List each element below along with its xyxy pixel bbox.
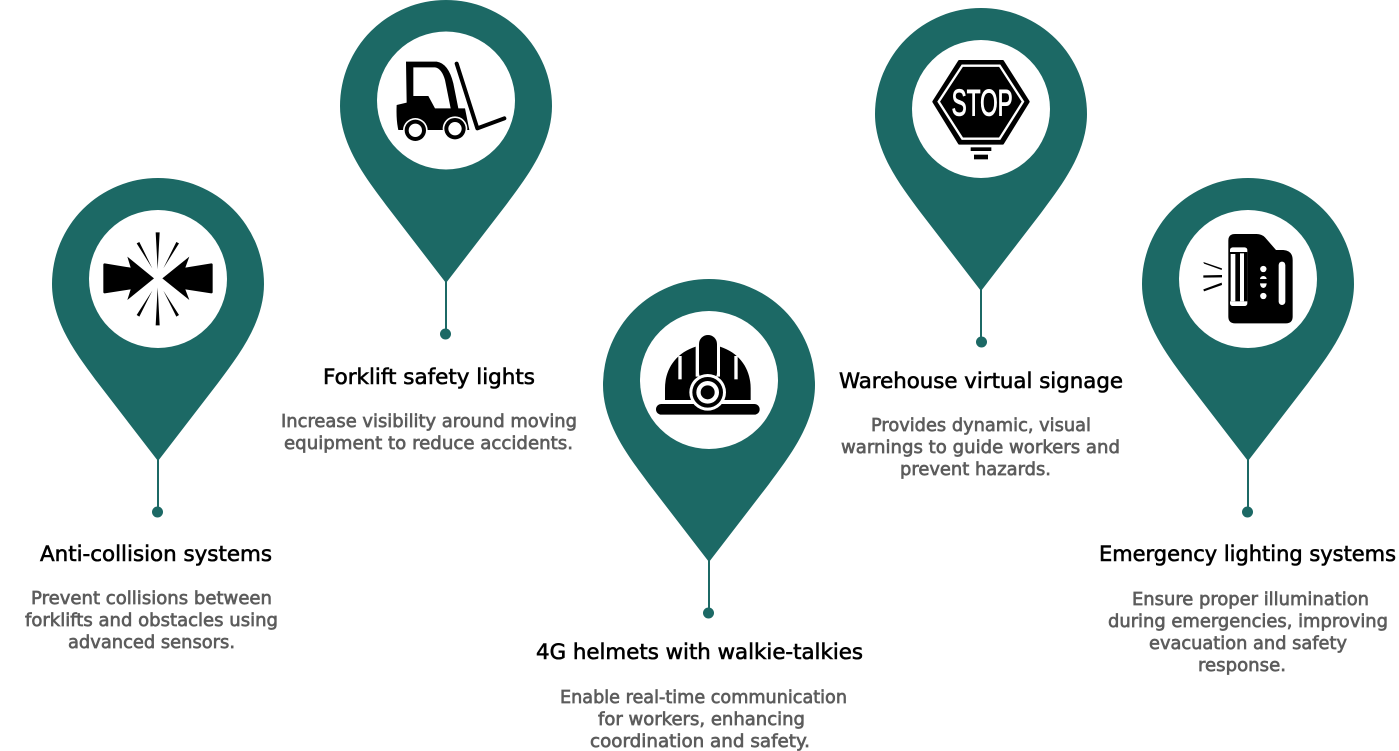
description: warehouse virtual signage: [841, 416, 1120, 480]
description: emergency lighting systems: [1108, 590, 1388, 676]
panel: emergency lighting systems: [1099, 178, 1396, 676]
description: 4G helmets: for workers, enhancing: [598, 710, 805, 730]
pin marker: anti-collision: [52, 178, 264, 518]
panel: anti-collision systems: [25, 178, 278, 653]
description: emergency lighting systems: response.: [1198, 656, 1286, 676]
pin marker: signage: [875, 8, 1087, 348]
description: anti-collision systems: [25, 589, 278, 653]
pin marker: emergency lighting: [1142, 178, 1354, 518]
description: anti-collision systems: Prevent collisions between: [31, 589, 272, 609]
description: emergency lighting systems: evacuation and safety: [1149, 634, 1347, 654]
pin marker: helmet: [603, 279, 815, 618]
icon: hard hat: [656, 335, 760, 415]
description: warehouse virtual signage: prevent hazards.: [900, 460, 1051, 480]
icon: stop sign: [934, 61, 1028, 159]
heading: forklift safety lights: Forklift safety lights: [323, 365, 535, 389]
panel: 4G helmets: [536, 279, 863, 751]
heading: anti-collision systems: Anti-collision systems: [40, 542, 272, 566]
description: forklift safety lights: equipment to reduce accidents.: [284, 434, 573, 454]
description: anti-collision systems: advanced sensors.: [68, 633, 235, 653]
heading: warehouse virtual signage: Warehouse virtual signage: [839, 369, 1123, 393]
description: anti-collision systems: forklifts and obstacles using: [25, 611, 278, 631]
pin marker: forklift: [340, 0, 552, 340]
description: 4G helmets: [560, 688, 847, 751]
icon: emergency light: [1203, 234, 1293, 323]
icon: stop sign: STOP: [952, 82, 1013, 123]
icon: colliding arrows: [103, 232, 213, 325]
heading: emergency lighting systems: Emergency lighting systems: [1099, 542, 1396, 566]
panel: forklift safety lights: [281, 0, 577, 454]
description: forklift safety lights: Increase visibility around moving: [281, 412, 577, 432]
description: 4G helmets: Enable real-time communication: [560, 688, 847, 708]
description: warehouse virtual signage: warnings to guide workers and: [841, 438, 1120, 458]
heading: 4G helmets with walkie-talkies: 4G helmets with walkie-talkies: [536, 640, 863, 664]
description: emergency lighting systems: Ensure proper illumination: [1132, 590, 1369, 610]
icon: forklift: [397, 62, 504, 143]
description: forklift safety lights: [281, 412, 577, 454]
description: warehouse virtual signage: Provides dynamic, visual: [871, 416, 1091, 436]
description: emergency lighting systems: during emergencies, improving: [1108, 612, 1388, 632]
panel: warehouse virtual signage: [839, 8, 1123, 480]
